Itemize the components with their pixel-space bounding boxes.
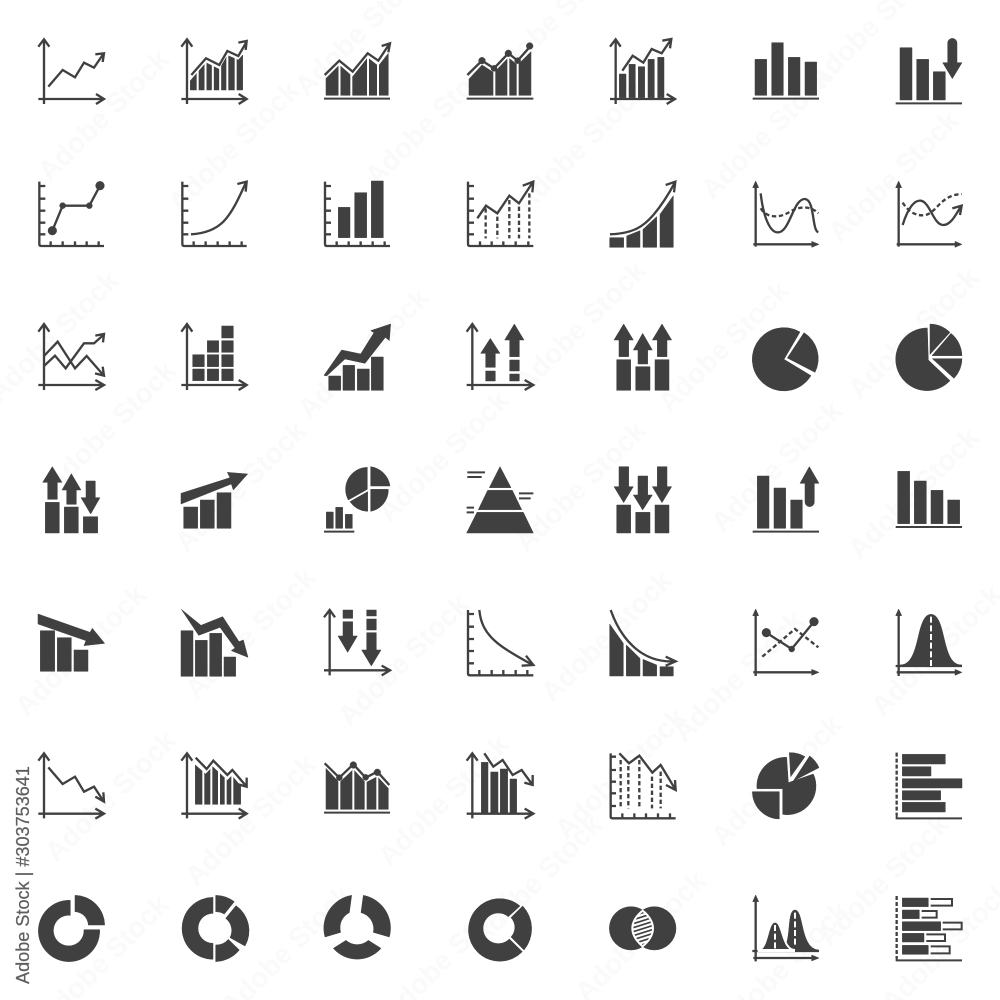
icon: decay bars with curve arrow (610, 610, 676, 676)
icon: two bell curves (752, 895, 819, 961)
icon: bars and rising arrow with axes (610, 39, 675, 104)
icon: line with dots on ticked axes (39, 181, 104, 246)
icon: four descending bars (896, 471, 962, 527)
icon: falling bold arrow over bars (181, 609, 248, 676)
icon: rising area bars with axes (181, 39, 247, 104)
watermark: repeated Adobe Stock: Adobe Stock (359, 49, 502, 192)
icon: three bars with down arrows (614, 467, 672, 533)
watermark: repeated Adobe Stock: Adobe Stock (179, 562, 322, 705)
icon: donut two parts (38, 895, 105, 962)
icon: falling area bars with dots (324, 762, 390, 813)
icon: rising line chart (38, 39, 104, 104)
icon: falling area bars with axes (181, 753, 247, 819)
icon: venn diagram with striped lens (609, 907, 676, 953)
icon: exponential bars with curve arrow (610, 182, 675, 247)
watermark: repeated Adobe Stock: Adobe Stock (695, 62, 838, 205)
icon: falling bars and arrow with axes (467, 753, 533, 819)
watermark: repeated Adobe Stock: Adobe Stock (822, 105, 965, 248)
icon: bell curve (896, 609, 962, 676)
watermark: repeated Adobe Stock: Adobe Stock (465, 809, 608, 952)
icon: donut four parts (182, 895, 249, 962)
watermark: repeated Adobe Stock: Adobe Stock (842, 262, 985, 405)
icon: decay curve on ticked axes (468, 610, 533, 675)
watermark: repeated Adobe Stock: Adobe Stock (842, 422, 985, 565)
icon: pie and small bars (324, 467, 390, 532)
watermark: repeated Adobe Stock: Adobe Stock (32, 44, 175, 187)
stock id side text: Adobe Stock | #303753641 (13, 766, 33, 984)
icon: horizontal gantt bars (897, 896, 962, 960)
watermark: repeated Adobe Stock: Adobe Stock (169, 415, 312, 558)
icon: falling wide arrow over bars (38, 614, 105, 671)
icon: exponential curve on ticked axes (182, 182, 247, 246)
icon: falling bars with up arrow (753, 467, 819, 532)
icon: falling line chart (38, 753, 104, 819)
watermark: repeated Adobe Stock: Adobe Stock (162, 75, 305, 218)
icon: pie chart two parts (752, 328, 818, 391)
icon: bars with up and down arrows (43, 467, 100, 533)
watermark: repeated Adobe Stock: Adobe Stock (652, 275, 795, 418)
icon: falling bars with down arrow (896, 38, 962, 103)
icon: wave arrow and dashed curve (896, 181, 962, 247)
icon: stacked blocks chart (181, 324, 247, 390)
icon: two crossing lines (38, 324, 104, 390)
icon: two up arrows on axes (467, 324, 533, 390)
icon: ring two parts (468, 899, 532, 961)
watermark: repeated Adobe Stock: Adobe Stock (705, 395, 848, 538)
icon: bold arrow over bars (324, 324, 391, 390)
watermark: repeated Adobe Stock: Adobe Stock (509, 255, 652, 398)
icon: exploded pie chart (752, 753, 819, 819)
icon: wave and dashed curves (753, 181, 819, 247)
icon: donut three separated parts (324, 895, 391, 959)
icon: three bars on ticked axes (325, 181, 390, 246)
watermark: repeated Adobe Stock: Adobe Stock (332, 589, 475, 732)
watermark: repeated Adobe Stock: Adobe Stock (179, 749, 322, 892)
icon: pyramid chart (467, 467, 533, 533)
watermark: repeated Adobe Stock: Adobe Stock (667, 605, 810, 748)
watermark: repeated Adobe Stock: Adobe Stock (292, 282, 435, 425)
watermark: repeated Adobe Stock: Adobe Stock (509, 415, 652, 558)
watermark: repeated Adobe Stock: Adobe Stock (9, 579, 152, 722)
watermark: repeated Adobe Stock: Adobe Stock (39, 355, 182, 498)
watermark: repeated Adobe Stock: Adobe Stock (549, 702, 692, 845)
watermark: repeated Adobe Stock: Adobe Stock (535, 565, 678, 708)
icon: horizontal bar chart (897, 753, 962, 818)
icon: simple bar chart (753, 43, 819, 99)
watermark: repeated Adobe Stock: Adobe Stock (372, 385, 515, 528)
watermark: repeated Adobe Stock: Adobe Stock (39, 725, 182, 868)
icon: rising wide arrow over bars (181, 472, 248, 528)
watermark: repeated Adobe Stock: Adobe Stock (705, 709, 848, 852)
icon: three bars with up arrows (614, 324, 672, 390)
watermark: repeated Adobe Stock: Adobe Stock (372, 729, 515, 872)
icon: falling line with dashed drops (611, 753, 676, 818)
icon: two down arrows on axes (324, 610, 390, 675)
icon: rising line with dashed drops (468, 182, 533, 246)
icon: rising area bars on baseline (324, 43, 390, 99)
icon: pie chart four parts (896, 324, 962, 391)
icon: rising area bars with dots (467, 43, 533, 99)
watermark: repeated Adobe Stock: Adobe Stock (812, 809, 955, 952)
watermark: repeated Adobe Stock: Adobe Stock (509, 75, 652, 218)
icon: dotted line and dashed line (753, 609, 819, 676)
